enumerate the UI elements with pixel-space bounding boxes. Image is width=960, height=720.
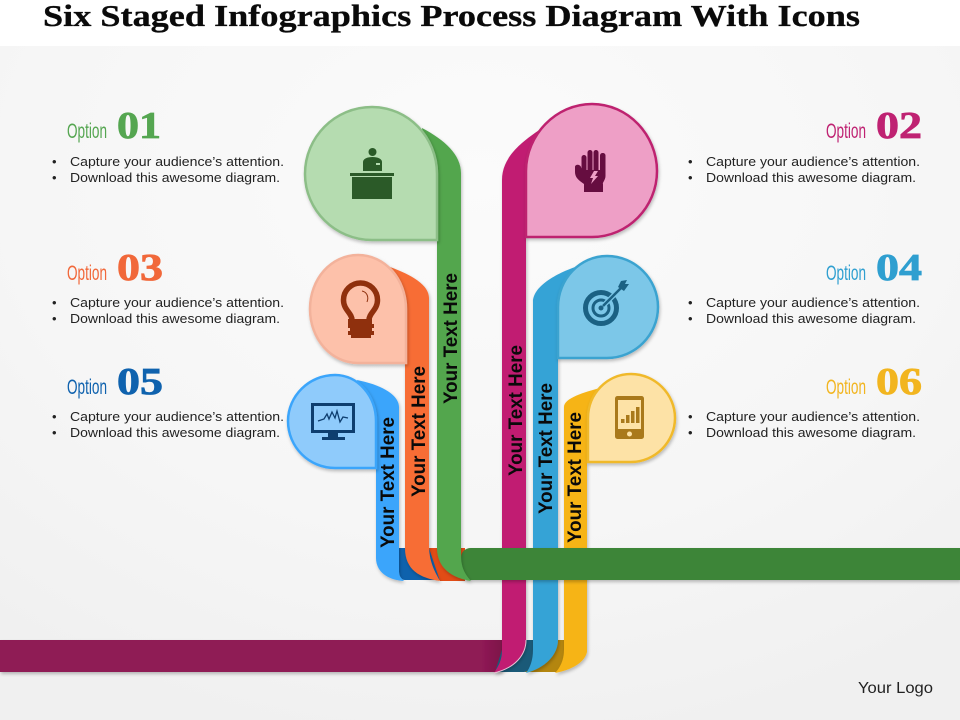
- icon: speaker at podium: [350, 148, 394, 199]
- text block: option 01: 01: [117, 105, 161, 147]
- panel: option 02 ribbon and teardrop: [494, 104, 657, 673]
- text block: option 05: Option: [67, 376, 107, 399]
- icon: monitor with pulse: [312, 404, 354, 440]
- text block: option 01: [52, 105, 284, 185]
- text block: option 03: 03: [117, 247, 163, 289]
- panel: option 05 ribbon and teardrop: [288, 375, 440, 581]
- ribbon label: teal: Your Text Here: [535, 383, 557, 514]
- text block: option 05: •: [52, 409, 57, 424]
- text block: option 04: •: [688, 311, 693, 326]
- text block: option 05: 05: [117, 361, 163, 403]
- dark green horizontal band: [461, 548, 960, 580]
- text block: option 01: •: [52, 170, 57, 185]
- text block: option 02: 02: [876, 105, 922, 147]
- text block: option 06: 06: [876, 361, 922, 403]
- text block: option 03: Capture your audience’s attention.: [70, 295, 284, 310]
- text block: option 06: Option: [826, 376, 866, 399]
- text block: option 05: Download this awesome diagram.: [70, 425, 280, 440]
- text block: option 04: Option: [826, 262, 866, 285]
- text block: option 03: Option: [67, 262, 107, 285]
- logo text: Your Logo: [858, 680, 933, 697]
- icon: target with arrow: [586, 280, 629, 324]
- text block: option 01: •: [52, 154, 57, 169]
- text block: option 02: [688, 105, 922, 185]
- panel: option 04 ribbon and teardrop: [495, 256, 658, 673]
- text block: option 05: •: [52, 425, 57, 440]
- icon: raised hand with lightning: [575, 150, 606, 192]
- panel: option 06 ribbon and teardrop: [525, 374, 675, 673]
- text block: option 02: Capture your audience’s attention.: [706, 154, 920, 169]
- icon: tablet with chart: [615, 396, 644, 439]
- panel: option 01 ribbon and teardrop: [305, 107, 471, 581]
- text block: option 06: •: [688, 409, 693, 424]
- text block: option 06: •: [688, 425, 693, 440]
- text block: option 04: •: [688, 295, 693, 310]
- ribbon label: pink: Your Text Here: [505, 345, 527, 476]
- text block: option 04: 04: [876, 247, 922, 289]
- text block: option 05: [52, 361, 284, 440]
- ribbon label: green: Your Text Here: [440, 273, 462, 404]
- icon: light bulb: [344, 283, 378, 338]
- text block: option 01: Capture your audience’s attention.: [70, 154, 284, 169]
- text block: option 06: Capture your audience’s attention.: [706, 409, 920, 424]
- text block: option 03: Download this awesome diagram.: [70, 311, 280, 326]
- text block: option 02: Option: [826, 120, 866, 143]
- text block: option 05: Capture your audience’s attention.: [70, 409, 284, 424]
- text block: option 06: Download this awesome diagram.: [706, 425, 916, 440]
- text block: option 04: Capture your audience’s attention.: [706, 295, 920, 310]
- ribbon label: orange: Your Text Here: [408, 366, 430, 497]
- text block: option 02: •: [688, 154, 693, 169]
- panel: option 03 ribbon and teardrop: [310, 255, 465, 581]
- text block: option 03: [52, 247, 284, 326]
- text block: option 04: [688, 247, 922, 326]
- text block: option 03: •: [52, 295, 57, 310]
- text block: option 04: Download this awesome diagram.: [706, 311, 916, 326]
- text block: option 02: Download this awesome diagram.: [706, 170, 916, 185]
- text block: option 06: [688, 361, 922, 440]
- text block: option 03: •: [52, 311, 57, 326]
- text block: option 02: •: [688, 170, 693, 185]
- text block: option 01: Download this awesome diagram.: [70, 170, 280, 185]
- ribbon label: yellow: Your Text Here: [564, 412, 586, 543]
- bottom-left maroon band: [0, 640, 502, 672]
- ribbon label: blue: Your Text Here: [377, 417, 399, 548]
- text block: option 01: Option: [67, 120, 107, 143]
